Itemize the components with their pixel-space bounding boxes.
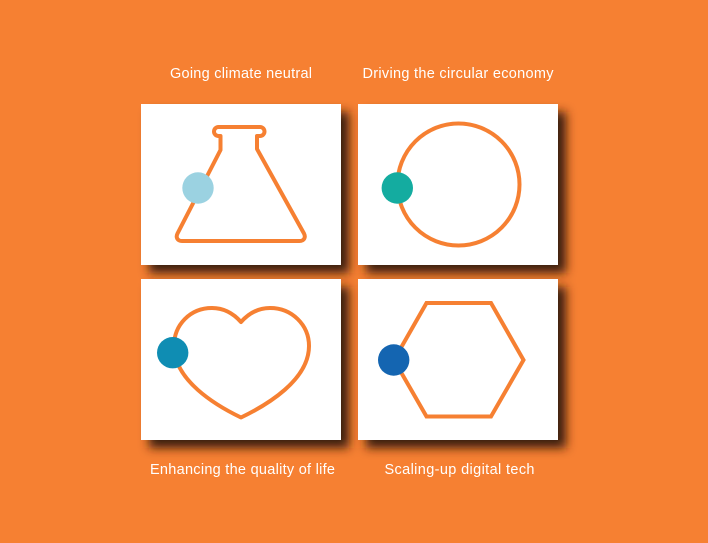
- icon: circle outline: [398, 124, 520, 246]
- icon: heart outline: [174, 308, 309, 418]
- icon: flask outline: [177, 127, 305, 241]
- marker: blue dot: [157, 337, 188, 368]
- panel: flask: [141, 104, 341, 265]
- marker: teal dot: [382, 172, 413, 204]
- panel: hexagon: [358, 279, 558, 440]
- panel: circle: [358, 104, 558, 265]
- icon: hexagon outline: [394, 303, 524, 416]
- marker: light blue dot: [182, 172, 214, 204]
- heading: Driving the circular economy: Driving the circular economy: [362, 66, 554, 82]
- heading: Scaling-up digital tech: Scaling-up digital tech: [384, 462, 534, 478]
- heading: Enhancing the quality of life: Enhancing the quality of life: [150, 462, 335, 478]
- panel: heart: [141, 279, 341, 440]
- card shadows: [149, 112, 566, 448]
- heading: Going climate neutral: Going climate neutral: [170, 66, 312, 82]
- marker: dark blue dot: [378, 344, 409, 376]
